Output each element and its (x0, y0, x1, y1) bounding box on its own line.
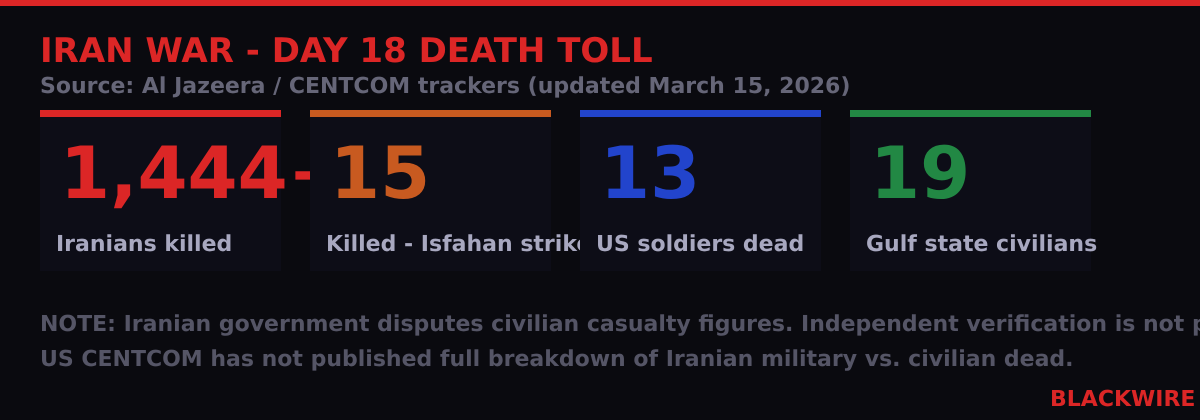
panel: US soldiers (580, 110, 821, 271)
label: US soldiers: US soldiers dead (596, 232, 804, 257)
note text: US CENTCOM has not published full breakdown of Iranian military vs. civilian dead. (40, 347, 1074, 372)
top accent bar (0, 0, 1200, 6)
accent bar: orange (310, 110, 551, 117)
accent bar: green (850, 110, 1091, 117)
accent bar: blue (580, 110, 821, 117)
number: Iranians killed: 1,444+ (60, 131, 348, 215)
number: Isfahan strike: 15 (330, 131, 430, 215)
panel: Gulf civilians (850, 110, 1091, 271)
label: Gulf civilians: Gulf state civilians (866, 232, 1097, 257)
note text (40, 312, 1200, 372)
label: Iranians killed: Iranians killed (56, 232, 232, 257)
source line: Source: Al Jazeera / CENTCOM trackers (updated March 15, 2026) (40, 74, 850, 99)
number: Gulf civilians: 19 (870, 131, 970, 215)
label: Isfahan strike: Killed - Isfahan strike (326, 232, 591, 257)
panel: Iranians killed (40, 110, 281, 271)
accent bar: red (40, 110, 281, 117)
brand mark: BLACKWIRE (1050, 387, 1195, 412)
title: IRAN WAR - DAY 18 DEATH TOLL (40, 31, 653, 71)
number: US soldiers: 13 (600, 131, 700, 215)
panel: Isfahan strike (310, 110, 551, 271)
